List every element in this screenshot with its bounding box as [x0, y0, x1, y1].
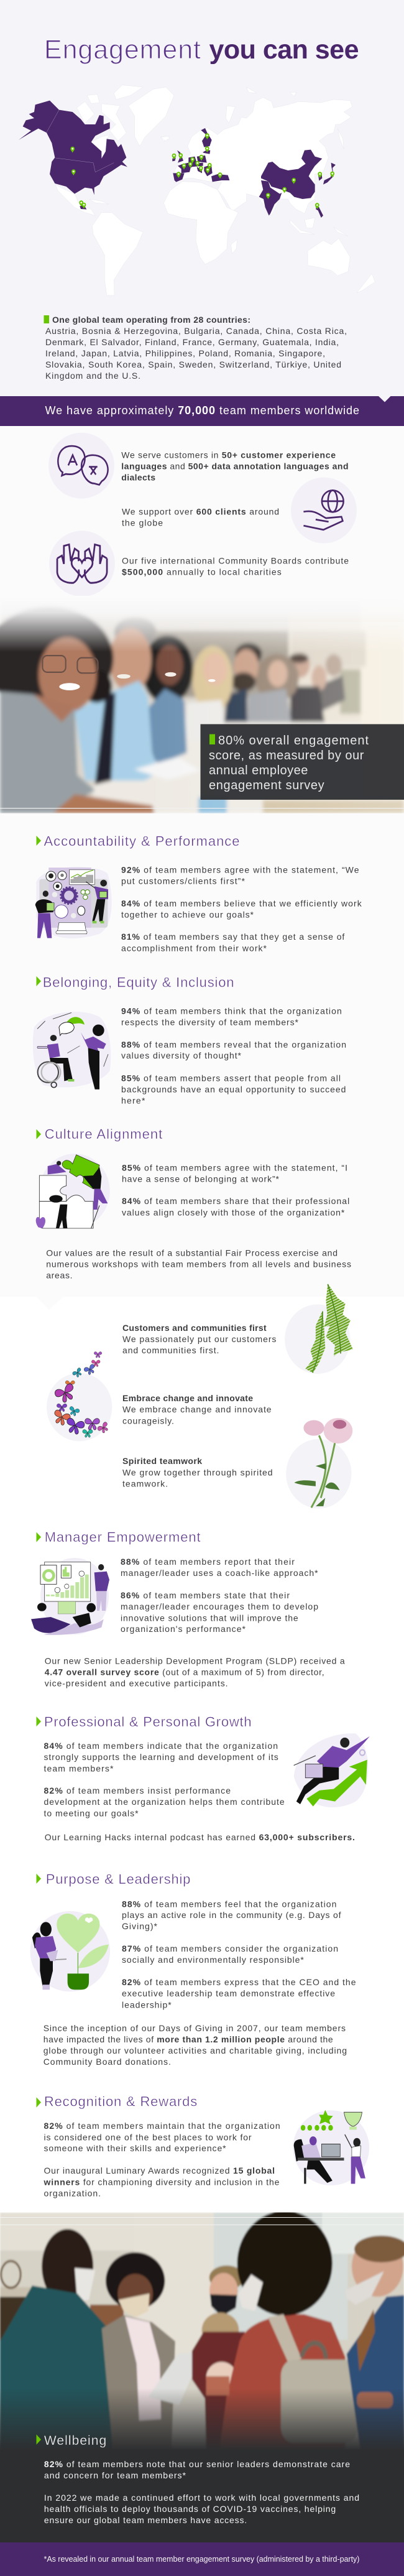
value: customers and communities: We passionately put our customers: [122, 1334, 276, 1344]
stats: backgrounds have an equal opportunity to succeed: [121, 1084, 346, 1094]
section: professional and personal growth: [36, 1714, 370, 1842]
heading: Culture Alignment: [45, 1126, 162, 1142]
fact: languages: languages and 500+ data annotation languages and: [121, 461, 349, 471]
icon: fern: [285, 1284, 353, 1374]
face details: [42, 656, 216, 690]
stats: Our Learning Hacks internal podcast has earned 63,000+ subscribers.: [45, 1832, 355, 1842]
stats: 84% of team members share that their professional: [122, 1196, 349, 1206]
stats: 82% of team members express that the CEO and the: [122, 1977, 356, 1987]
fact: community boards: Our five international Community Boards contribute: [122, 555, 349, 565]
person far right: [289, 653, 346, 722]
stats: [122, 1163, 349, 1218]
photo: smiling team: [0, 596, 404, 814]
map: americas: [19, 85, 174, 295]
map pins: [70, 133, 334, 209]
stats: 81% of team members say that they get a sense of: [121, 932, 344, 942]
fact: community boards: $500,000 annually to local charities: [122, 567, 282, 577]
stats: ensure our global team members have access.: [44, 2515, 247, 2525]
panel: values: [47, 1284, 353, 1509]
icon: hands and heart: [49, 530, 115, 596]
stats: is considered one of the best places to work for: [44, 2132, 252, 2142]
fact: community boards: [122, 555, 349, 577]
stats: organization.: [44, 2188, 101, 2198]
illustration: growth dashboard: [31, 1558, 109, 1635]
woman with cream mask: [102, 2252, 175, 2454]
icon: globe in hand: [291, 478, 357, 544]
section: purpose and leadership: [30, 1871, 356, 2067]
stats: 88% of team members report that their: [121, 1557, 295, 1567]
stats: someone with their skills and experience*: [44, 2143, 226, 2153]
illustration: wheelchair conversation: [33, 1012, 111, 1090]
heading: Wellbeing: [44, 2434, 106, 2448]
countries text block: Kingdom and the U.S.: [45, 371, 140, 381]
stats: manager/leader encourages them to develop: [121, 1601, 318, 1611]
heading: Accountability & Performance: [44, 833, 240, 849]
section: belonging equity and inclusion: [33, 975, 346, 1106]
stats: 86% of team members state that their: [121, 1590, 290, 1600]
days of giving text: globe through our volunteer activities and charitable giving, including: [44, 2046, 347, 2055]
icon: butterflies: [47, 1351, 112, 1441]
stats: 82% of team members note that our senior leaders demonstrate care: [44, 2459, 350, 2469]
fact: clients: [122, 506, 279, 528]
stats: 85% of team members agree with the statement, “I: [122, 1163, 347, 1173]
stats: together to achieve our goals*: [121, 909, 254, 919]
icon: languages: [48, 433, 114, 499]
value: embrace change: [122, 1393, 272, 1425]
stats: 84% of team members indicate that the organization: [44, 1741, 278, 1751]
stats: [44, 1741, 355, 1842]
SLDP text: vice-president and executive participants.: [45, 1678, 227, 1688]
woman with black mask: [192, 2266, 245, 2454]
heading: Belonging, Equity & Inclusion: [43, 975, 234, 990]
countries text block: Denmark, El Salvador, Finland, France, Germany, Guatemala, India,: [45, 337, 339, 347]
stats: executive leadership team demonstrate effective: [122, 1988, 335, 1998]
stats: [122, 1899, 356, 2009]
footer: survey note: [0, 2542, 404, 2576]
callout: engagement score: score, as measured by our: [209, 749, 364, 762]
stats: and concern for team members*: [44, 2470, 186, 2480]
value: embrace change: courageisly.: [122, 1415, 174, 1425]
fair process text: [46, 1248, 351, 1280]
stats: development at the organization helps them contribute: [44, 1797, 285, 1807]
stats: manager/leader uses a coach-like approach*: [121, 1568, 318, 1578]
stats: 85% of team members assert that people from all: [121, 1073, 341, 1083]
fact: languages: We serve customers in 50+ customer experience: [121, 450, 336, 460]
stats: 92% of team members agree with the statement, “We: [121, 865, 359, 875]
SLDP text: Our new Senior Leadership Development Program (SLDP) received a: [45, 1656, 345, 1666]
stats: [121, 865, 362, 953]
stats: 94% of team members think that the organization: [121, 1006, 342, 1016]
fact: clients: We support over 600 clients around: [122, 506, 279, 516]
illustration: person flying up arrow: [294, 1733, 370, 1807]
title: Engagement: [44, 35, 201, 65]
stats: organization's performance*: [121, 1624, 246, 1634]
stats: 88% of team members reveal that the organization: [121, 1039, 346, 1049]
heading: Manager Empowerment: [45, 1529, 201, 1545]
title: you can see: [209, 35, 359, 65]
heading: Recognition & Rewards: [44, 2093, 197, 2110]
stats: values align closely with those of the organization*: [122, 1208, 345, 1218]
days of giving text: [44, 2023, 347, 2067]
footer: survey note: *As revealed in our annual team member engagement survey (administered by a third-party): [44, 2555, 359, 2564]
world map: [19, 85, 375, 295]
countries text block: Ireland, Japan, Latvia, Philippines, Poland, Romania, Singapore,: [45, 348, 325, 358]
stats: leadership*: [122, 1999, 172, 2009]
countries text block: [44, 315, 347, 381]
heading: Professional & Personal Growth: [44, 1714, 252, 1730]
illustration: awards: [293, 2110, 369, 2185]
stats: winners for championing diversity and inclusion in the: [44, 2177, 280, 2187]
countries text block: One global team operating from 28 countries:: [52, 315, 250, 325]
section: wellbeing: [0, 2434, 404, 2542]
stats: team members*: [44, 1763, 114, 1773]
stats: to meeting our goals*: [44, 1808, 139, 1818]
woman in gray: [0, 606, 155, 813]
value: embrace change: We embrace change and innovate: [122, 1404, 272, 1414]
stats: [121, 1006, 346, 1106]
section: recognition and rewards: [36, 2093, 369, 2198]
stats: have a sense of belonging at work”*: [122, 1174, 280, 1184]
title: [44, 35, 359, 65]
man with tie: [75, 617, 160, 785]
heading: Purpose & Leadership: [46, 1871, 190, 1887]
countries text block: Austria, Bosnia & Herzegovina, Bulgaria, Canada, China, Costa Rica,: [45, 326, 347, 336]
days of giving text: Community Board donations.: [44, 2057, 171, 2067]
woman in denim: [142, 635, 193, 764]
panel: key facts: [48, 433, 357, 596]
banner: team members: We have approximately 70,000 team members worldwide: [45, 404, 359, 417]
section: accountability and performance: [35, 833, 362, 953]
stats: Our inaugural Luminary Awards recognized 15 global: [44, 2166, 275, 2175]
fact: languages: dialects: [121, 473, 155, 483]
stats: health officials to deploy thousands of COVID-19 vaccines, helping: [44, 2504, 336, 2514]
stats: [44, 2121, 280, 2198]
value: spirited teamwork: Spirited teamwork: [122, 1456, 202, 1466]
value: spirited teamwork: teamwork.: [122, 1478, 168, 1488]
stats: values diversity of thought*: [121, 1050, 242, 1060]
stats: 88% of team members feel that the organization: [122, 1899, 336, 1909]
value: customers and communities: Customers and communities first: [122, 1323, 267, 1333]
stats: [44, 2459, 359, 2525]
stats: socially and environmentally responsible*: [122, 1955, 304, 1965]
illustration: watering heart plant: [30, 1911, 110, 1991]
value: embrace change: Embrace change and innovate: [122, 1393, 253, 1403]
fact: clients: the globe: [122, 518, 163, 528]
woman with glasses: [247, 654, 299, 722]
stats: 82% of team members maintain that the organization: [44, 2121, 280, 2131]
section: manager empowerment: [31, 1529, 345, 1688]
man with white mask: [346, 2236, 404, 2454]
SLDP text: [45, 1656, 345, 1688]
days of giving text: Since the inception of our Days of Giving in 2007, our team members: [44, 2023, 346, 2033]
fair process text: numerous workshops with team members from all levels and business: [46, 1259, 351, 1269]
countries text block: Slovakia, South Korea, Spain, Sweden, Switzerland, Türkiye, United: [45, 359, 341, 369]
value: customers and communities: and communities first.: [122, 1345, 219, 1355]
callout: engagement score: annual employee: [209, 764, 308, 777]
days of giving text: have impacted the lives of more than 1.2 million people around the: [44, 2034, 333, 2044]
map: eurasia africa oceania: [160, 87, 375, 293]
value: customers and communities: [122, 1323, 276, 1355]
stats: Giving)*: [122, 1921, 158, 1931]
stats: 84% of team members believe that we efficiently work: [121, 899, 362, 909]
stats: 82% of team members insist performance: [44, 1786, 231, 1795]
stats: [121, 1557, 318, 1634]
value: spirited teamwork: We grow together through spirited: [122, 1467, 273, 1477]
stats: In 2022 we made a continued effort to work with local governments and: [44, 2493, 359, 2503]
man in teal shirt: [0, 2228, 112, 2448]
SLDP text: 4.47 overall survey score (out of a maximum of 5) from director,: [45, 1667, 324, 1677]
stats: put customers/clients first”*: [121, 876, 245, 886]
callout: engagement score: engagement survey: [209, 779, 324, 792]
stats: 87% of team members consider the organization: [122, 1944, 338, 1953]
stats: accomplishment from their work*: [121, 943, 267, 953]
fact: languages: [121, 450, 349, 483]
person with backpack: [219, 2211, 357, 2454]
stats: here*: [121, 1096, 145, 1106]
stats: strongly supports the learning and development of its: [44, 1752, 278, 1762]
section: culture alignment: [36, 1126, 351, 1280]
callout: engagement score: 80% overall engagement: [218, 734, 369, 748]
value: spirited teamwork: [122, 1456, 273, 1488]
fair process text: Our values are the result of a substantial Fair Process exercise and: [46, 1248, 337, 1258]
stats: innovative solutions that will improve the: [121, 1613, 298, 1623]
stats: respects the diversity of team members*: [121, 1017, 299, 1027]
callout: engagement score: [200, 724, 404, 800]
illustration: puzzle pieces: [36, 1154, 110, 1228]
icon: flowers: [286, 1418, 352, 1509]
fair process text: areas.: [46, 1270, 72, 1280]
banner: team members: [0, 396, 404, 426]
stats: plays an active role in the community (e.g. Days of: [122, 1910, 341, 1920]
photo: colleagues in masks: [0, 2211, 404, 2454]
bearded man: [224, 642, 262, 722]
illustration: monitor and people: [35, 867, 112, 938]
blonde woman: [184, 646, 232, 741]
